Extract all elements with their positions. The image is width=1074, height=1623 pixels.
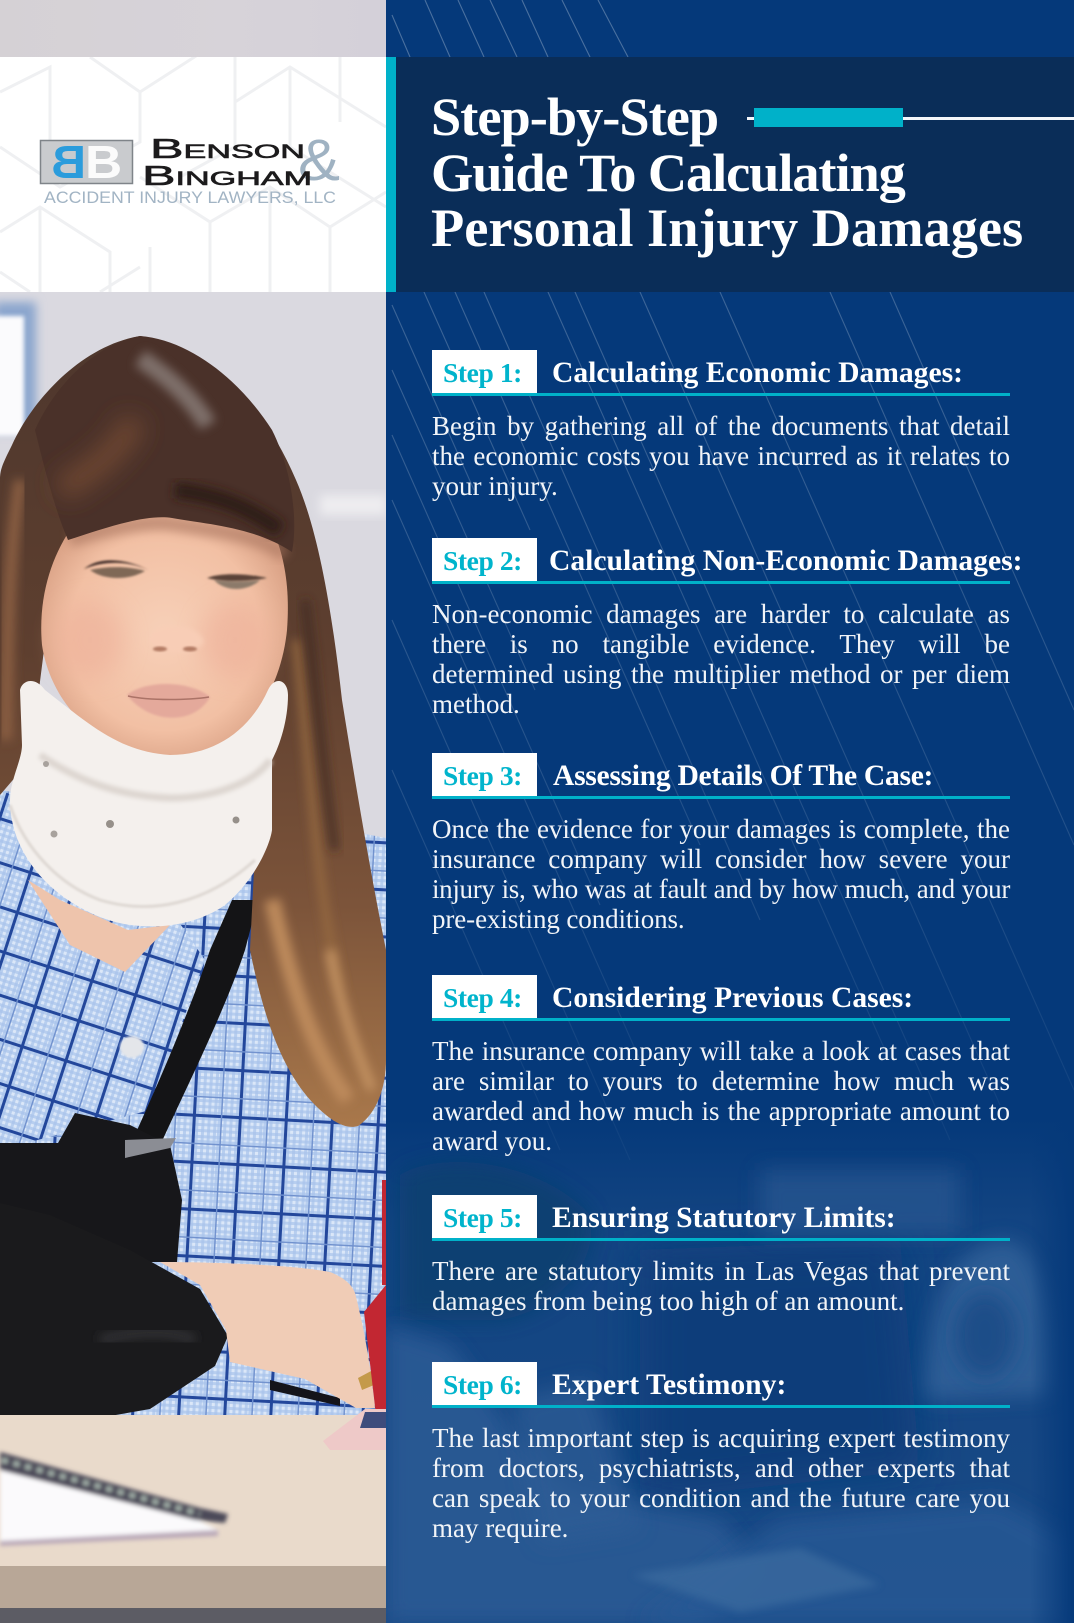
faded office photo xyxy=(386,1120,1074,1623)
step 3: Assessing Details Of The Case: xyxy=(553,760,933,792)
title xyxy=(431,87,1023,258)
table and hand xyxy=(640,1500,1074,1623)
title: Step-by-Step xyxy=(431,87,718,147)
step 1 xyxy=(432,350,1010,501)
person right face xyxy=(955,1293,1015,1377)
step 2: method. xyxy=(432,689,520,719)
arm sling strap xyxy=(133,900,258,1139)
step 3: insurance company will consider how severe your xyxy=(432,844,1010,874)
step 3: Once the evidence for your damages is complete, the xyxy=(432,814,1010,844)
fringe xyxy=(35,336,294,552)
step 3 xyxy=(432,753,1010,934)
step 2 xyxy=(432,538,1022,719)
step 4 xyxy=(432,975,1010,1156)
background panel: blue column xyxy=(386,0,1074,1623)
step 5: Step 5: xyxy=(443,1202,522,1233)
diagonal hatch lines xyxy=(392,292,1074,1160)
neck brace xyxy=(10,681,288,926)
step 4: Considering Previous Cases: xyxy=(552,982,913,1014)
arm sling xyxy=(0,1113,228,1416)
lips xyxy=(127,684,210,718)
papers xyxy=(632,1548,880,1612)
notebook xyxy=(0,1452,228,1546)
logo mark xyxy=(40,128,340,207)
desk xyxy=(0,1415,386,1623)
step 4: The insurance company will take a look at cases that xyxy=(432,1036,1010,1066)
step 1: your injury. xyxy=(432,471,558,501)
person right hair xyxy=(925,1240,1051,1400)
logo panel xyxy=(0,57,386,292)
left eye xyxy=(84,560,148,578)
phone xyxy=(323,1409,386,1450)
neck skin xyxy=(28,880,170,972)
step 6: may require. xyxy=(432,1513,568,1543)
shirt xyxy=(0,790,386,1420)
step 6: The last important step is acquiring expert testimony xyxy=(432,1423,1010,1453)
step 2: there is no tangible evidence. They will be xyxy=(432,629,1010,659)
person left hair xyxy=(400,1162,592,1320)
step 1: the economic costs you have incurred as it relates to xyxy=(432,441,1010,471)
dark centre shadow xyxy=(640,1240,920,1500)
right eye xyxy=(207,574,267,589)
logo mark: B xyxy=(51,136,86,188)
step 4: award you. xyxy=(432,1126,552,1156)
header accent line xyxy=(747,108,1074,127)
step 6: can speak to your condition and the future care you xyxy=(432,1483,1010,1513)
step 2: Calculating Non-Economic Damages: xyxy=(549,545,1022,577)
face xyxy=(41,505,288,760)
step 1: Begin by gathering all of the documents that detail xyxy=(432,411,1010,441)
header panel xyxy=(396,57,1074,292)
step 2: Non-economic damages are harder to calculate as xyxy=(432,599,1010,629)
step 5: damages from being too high of an amount. xyxy=(432,1286,904,1316)
step 6: from doctors, psychiatrists, and other experts that xyxy=(432,1453,1010,1483)
title: Guide To Calculating xyxy=(431,143,905,203)
logo wordmark: B INGHAM xyxy=(142,160,312,191)
step 4: Step 4: xyxy=(443,982,522,1013)
hair back and strands xyxy=(0,336,386,1127)
title: Personal Injury Damages xyxy=(431,198,1023,258)
step 6: Expert Testimony: xyxy=(552,1369,786,1401)
photo: injured woman with neck brace and arm sling xyxy=(0,0,386,1623)
person left back xyxy=(386,1325,760,1623)
step 6: Step 6: xyxy=(443,1369,522,1400)
geometric pattern xyxy=(0,57,386,292)
nose xyxy=(148,626,204,652)
logo ampersand: & xyxy=(298,128,340,193)
step 1: Step 1: xyxy=(443,357,522,388)
step 5: Ensuring Statutory Limits: xyxy=(552,1202,896,1234)
step 5 xyxy=(432,1195,1010,1316)
step 3: Step 3: xyxy=(443,760,522,791)
logo mark: B xyxy=(85,137,122,188)
step 5: There are statutory limits in Las Vegas that prevent xyxy=(432,1256,1010,1286)
step 3: injury is, who was at fault and by how much, and your xyxy=(432,874,1010,904)
office background xyxy=(0,0,386,1623)
step 4: awarded and how much is the appropriate amount to xyxy=(432,1096,1010,1126)
logo wordmark xyxy=(142,133,312,191)
forearm and hand xyxy=(160,1262,375,1408)
step 3: pre-existing conditions. xyxy=(432,904,685,934)
teal divider xyxy=(386,57,396,292)
red object xyxy=(364,1180,386,1415)
shelves xyxy=(760,1170,960,1235)
logo tagline: ACCIDENT INJURY LAWYERS, LLC xyxy=(44,189,336,207)
step 4: are similar to yours to determine how much was xyxy=(432,1066,1010,1096)
step 2: determined using the multiplier method or per diem xyxy=(432,659,1010,689)
step 6 xyxy=(432,1362,1010,1543)
step 1: Calculating Economic Damages: xyxy=(552,357,963,389)
logo wordmark: B ENSON xyxy=(150,133,305,164)
step 2: Step 2: xyxy=(443,545,522,576)
laptop xyxy=(510,1380,640,1545)
